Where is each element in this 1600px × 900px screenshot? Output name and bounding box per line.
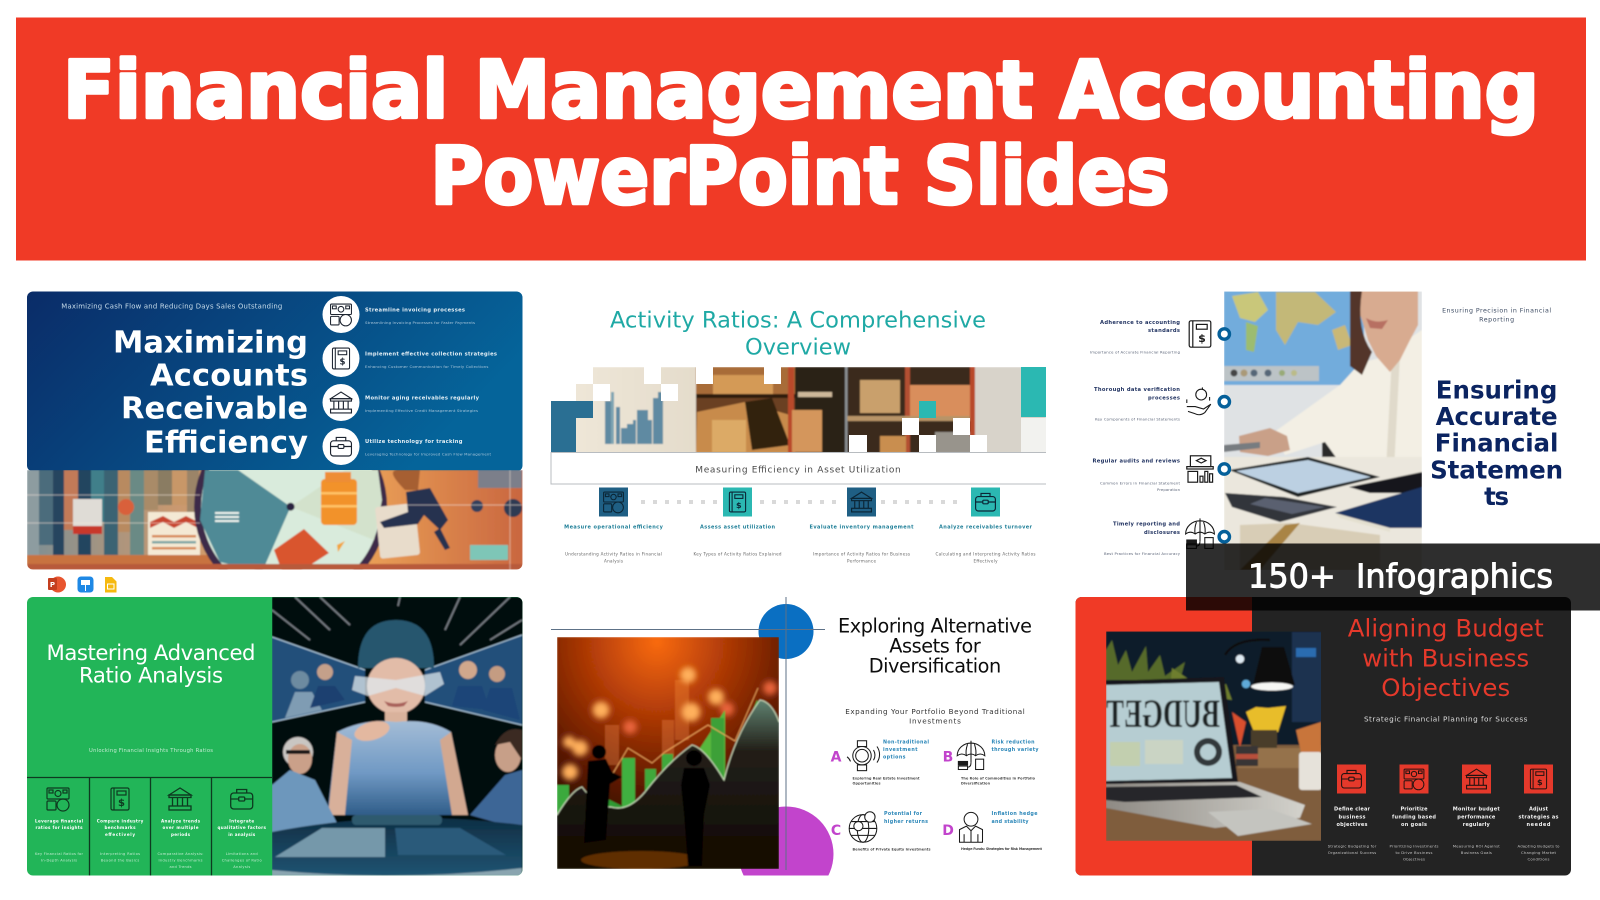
column labels: Compare industry (97, 818, 144, 823)
subtitle: Unlocking Financial Insights Through Ratios (89, 748, 213, 754)
icon: audit report (1187, 456, 1213, 482)
step descriptions (565, 552, 1036, 564)
option labels: Inflation hedge (992, 811, 1038, 817)
column descriptions: Key Financial Ratios for (35, 852, 84, 856)
column labels: effectively (105, 832, 135, 837)
column labels: in analysis (228, 832, 256, 837)
icon: hand with coin (1187, 387, 1211, 415)
photo: woman reviewing documents (1224, 291, 1422, 571)
checklist text: Adherence to accounting (1100, 320, 1180, 326)
option letters: C (831, 823, 841, 839)
callout: 150+ infographics badge: 150+ Infographics (1248, 556, 1553, 595)
step descriptions: Understanding Activity Ratios in Financial (565, 552, 662, 557)
option descriptions (852, 776, 1042, 852)
option letters (831, 749, 954, 839)
icon: book: $ (1198, 332, 1206, 345)
icon: book: $ (118, 798, 125, 809)
slide heading: Mastering Advanced (46, 640, 256, 665)
icon: money tile (599, 488, 628, 516)
action list: Enhancing Customer Communication for Timely Collections (365, 364, 488, 369)
option labels: Non-traditional (883, 739, 929, 745)
column labels: business (1338, 814, 1366, 820)
column labels: Leverage financial (35, 818, 84, 823)
panel: accounts receivable slide (27, 292, 523, 600)
option descriptions: Hedge Funds: Strategies for Risk Management (961, 847, 1042, 851)
subtitle: Maximizing Cash Flow and Reducing Days Sales Outstanding (61, 302, 282, 310)
column descriptions: Changing Market (1521, 850, 1556, 855)
column descriptions: Comparative Analysis: (158, 852, 204, 856)
slide heading: Ratio Analysis (79, 663, 223, 688)
option labels: through variety (992, 747, 1039, 753)
checklist text: Regular audits and reviews (1092, 458, 1180, 464)
slide heading (113, 326, 308, 460)
slide heading: with Business (1362, 644, 1529, 673)
icon: book tile: $ (736, 500, 742, 510)
icon: briefcase tile (971, 488, 1000, 516)
option labels: investment (883, 747, 918, 753)
option labels: Risk reduction (992, 739, 1035, 745)
step descriptions: Importance of Activity Ratios for Business (813, 552, 910, 557)
slide heading: Ensuring (1436, 375, 1557, 404)
slide heading: Overview (745, 335, 851, 361)
checklist text: disclosures (1144, 530, 1180, 536)
slide heading: Aligning Budget (1348, 614, 1544, 643)
subtitle: Investments (909, 717, 961, 726)
icon: book (111, 788, 129, 810)
icon: bank tile (847, 488, 876, 516)
column descriptions: Adapting Budgets to (1518, 843, 1560, 848)
step descriptions: Key Types of Activity Ratios Explained (694, 552, 782, 557)
option labels: higher returns (884, 819, 928, 825)
column descriptions: Interpreting Ratios (100, 852, 140, 856)
icon: book tile (723, 488, 752, 516)
slide heading: Activity Ratios: A Comprehensive (610, 307, 986, 333)
option letters: D (942, 823, 954, 839)
caption box: Measuring Efficiency in Asset Utilization (695, 466, 901, 476)
option letters: B (943, 749, 953, 765)
column descriptions: Business Goals (1461, 850, 1492, 855)
icon: watch (847, 741, 880, 771)
action list: Streamlining Invoicing Processes for Faster Payments (365, 320, 475, 325)
subtitle: Strategic Financial Planning for Success (1364, 714, 1528, 723)
illustration: finance collage (27, 470, 522, 570)
column labels: Integrate (229, 818, 254, 823)
heading: Financial Management Accounting (63, 44, 1539, 136)
photo: silhouettes and market chart (557, 637, 779, 869)
icon: bank (169, 788, 191, 810)
connector dots (641, 500, 957, 504)
icons: file formats (48, 576, 116, 592)
heading (63, 44, 1539, 222)
slide heading (1430, 375, 1563, 511)
column labels: Prioritize (1400, 807, 1428, 813)
step descriptions: Performance (847, 559, 876, 564)
slide heading: Objectives (1381, 673, 1510, 702)
slide heading: Diversification (869, 655, 1001, 678)
column labels: Analyze trends (161, 818, 201, 823)
checklist text: processes (1148, 395, 1180, 401)
icon: powerpoint: P (50, 581, 55, 589)
step labels: Assess asset utilization (700, 524, 775, 530)
slide heading (46, 640, 256, 688)
step labels: Analyze receivables turnover (939, 524, 1033, 530)
action list: Streamline invoicing processes (365, 308, 465, 314)
icon: umbrella (957, 741, 985, 770)
icon: investor (960, 812, 982, 842)
column labels (35, 818, 267, 837)
column dividers (27, 778, 272, 876)
column descriptions: Measuring ROI Against (1453, 843, 1500, 848)
icon: book tile (1524, 764, 1553, 794)
checklist text (1090, 320, 1181, 556)
step descriptions: Calculating and Interpreting Activity Ratios (936, 552, 1036, 557)
column labels: ratios for insights (36, 825, 83, 830)
slide heading: Accounts (150, 358, 308, 394)
checklist text: Importance of Accurate Financial Reporting (1090, 349, 1181, 354)
column descriptions: Beyond the Basics (101, 859, 139, 863)
column labels: strategies as (1518, 814, 1559, 820)
caption box (551, 452, 1046, 484)
checklist text: Common Errors in Financial Statement (1100, 480, 1180, 485)
checklist text: Timely reporting and (1113, 522, 1180, 528)
subtitle (845, 707, 1025, 726)
slide heading: Receivable (121, 392, 308, 426)
panel: financial statements slide (1090, 291, 1563, 571)
icon: umbrella (1186, 518, 1214, 548)
option labels: and stability (992, 819, 1029, 825)
action list: Leveraging Technology for Improved Cash Flow Management (365, 452, 491, 456)
column labels: qualitative factors (217, 825, 267, 830)
action list: Utilize technology for tracking (365, 439, 463, 445)
slide heading: Financial (1435, 429, 1558, 458)
step labels: Evaluate inventory management (810, 524, 914, 530)
column descriptions: and Trends (170, 865, 192, 869)
decor: purple circle (740, 806, 834, 876)
icon: google slides (105, 577, 116, 592)
option labels (883, 739, 1039, 825)
column descriptions: Prioritizing Investments (1390, 843, 1439, 848)
icon: book tile: $ (1537, 777, 1543, 787)
subtitle (1442, 308, 1551, 324)
slide heading: Statemen (1430, 455, 1563, 484)
action list: Implement effective collection strategies (365, 352, 497, 358)
icon: globe (849, 812, 877, 842)
column descriptions: Strategic Budgeting for (1328, 843, 1377, 848)
icon: ledger book (322, 340, 360, 377)
step labels (564, 524, 1033, 530)
column labels: Monitor budget (1453, 807, 1500, 813)
column descriptions: Organizational Success (1328, 850, 1376, 855)
callout: 150+ infographics badge (1186, 544, 1600, 610)
icon: briefcase (322, 428, 360, 465)
slide heading: Accurate (1436, 402, 1558, 431)
slide heading (610, 307, 986, 361)
action list: Monitor aging receivables regularly (365, 395, 480, 401)
column labels: objectives (1336, 822, 1368, 828)
column labels: benchmarks (104, 825, 136, 830)
column descriptions: to Drive Business (1396, 850, 1433, 855)
panel: ratio analysis slide (27, 597, 523, 876)
action list: Implementing Effective Credit Management Strategies (365, 408, 478, 413)
icon: book (1189, 321, 1211, 347)
icon: briefcase tile (1337, 764, 1366, 794)
column labels: on goals (1401, 822, 1427, 828)
option descriptions: Opportunities (852, 782, 880, 786)
column descriptions: Challenges of Ratio (222, 859, 262, 863)
icon: ledger book: $ (339, 358, 345, 368)
slide heading: Exploring Alternative (838, 615, 1032, 638)
step labels: Measure operational efficiency (564, 524, 664, 530)
column labels: periods (171, 832, 191, 837)
slide heading: ts (1484, 482, 1509, 511)
column descriptions: In-Depth Analysis (41, 859, 77, 863)
column descriptions: Conditions (1528, 856, 1550, 862)
option descriptions: Exploring Real Estate Investment (852, 776, 920, 780)
icon: money (47, 788, 69, 811)
icon: bank (322, 384, 360, 421)
slide heading: Maximizing (113, 326, 308, 361)
decor: blue circle (758, 604, 814, 659)
column descriptions: Industry Benchmarks (158, 859, 203, 863)
slide heading (1348, 614, 1544, 702)
slide heading: Assets for (889, 635, 981, 658)
column descriptions (35, 852, 262, 869)
heading: PowerPoint Slides (430, 130, 1170, 222)
subtitle: Ensuring Precision in Financial (1442, 308, 1551, 315)
panel: activity ratios slide (551, 307, 1046, 564)
column labels: funding based (1392, 814, 1436, 820)
column labels: regularly (1463, 822, 1491, 828)
column descriptions (1328, 843, 1560, 862)
column descriptions: Limitations and (226, 852, 258, 856)
cross lines (551, 597, 825, 870)
checklist text: standards (1148, 328, 1180, 334)
step descriptions: Effectively (974, 559, 998, 564)
column labels: over multiple (162, 825, 199, 830)
column labels (1334, 807, 1559, 828)
icon: bank tile (1462, 764, 1491, 794)
checklist text: Preparation (1157, 487, 1181, 492)
icon: keynote (78, 576, 94, 592)
icon: briefcase (231, 790, 253, 809)
photo: laptop showing budget (1106, 631, 1322, 841)
title banner (16, 18, 1586, 260)
option labels: options (883, 755, 906, 761)
column labels: Define clear (1334, 807, 1371, 813)
column descriptions: Analysis (233, 865, 250, 869)
subtitle: Reporting (1479, 317, 1514, 324)
column descriptions: Objectives (1403, 856, 1425, 862)
option letters: A (831, 749, 842, 765)
checklist text: Thorough data verification (1094, 387, 1180, 393)
slide heading (838, 615, 1032, 678)
column labels: performance (1457, 814, 1496, 820)
subtitle: Expanding Your Portfolio Beyond Traditional (845, 707, 1025, 716)
photo: laptop showing budget: BUDGET (1106, 691, 1220, 736)
option descriptions: Benefits of Private Equity Investments (852, 848, 930, 852)
icon: invoice money (322, 296, 360, 333)
column labels: Adjust (1529, 807, 1549, 813)
timeline markers (1219, 329, 1230, 542)
photo: warehouse shelves (551, 367, 1046, 453)
option descriptions: The Role of Commodities in Portfolio (961, 776, 1036, 780)
panel: budget slide (1076, 597, 1571, 876)
slide heading: Efficiency (144, 425, 308, 460)
photo: woman with holographic screens (272, 597, 523, 876)
option labels: Potential for (884, 811, 923, 817)
column labels: needed (1526, 822, 1551, 828)
icon: money tile (1400, 764, 1428, 794)
step descriptions: Analysis (604, 559, 623, 564)
option descriptions: Diversification (961, 782, 991, 786)
checklist text: Key Components of Financial Statements (1095, 417, 1180, 422)
panel: alternative assets slide (551, 597, 1042, 900)
checklist text: Best Practices for Financial Accuracy (1104, 551, 1181, 556)
action list (365, 308, 497, 456)
